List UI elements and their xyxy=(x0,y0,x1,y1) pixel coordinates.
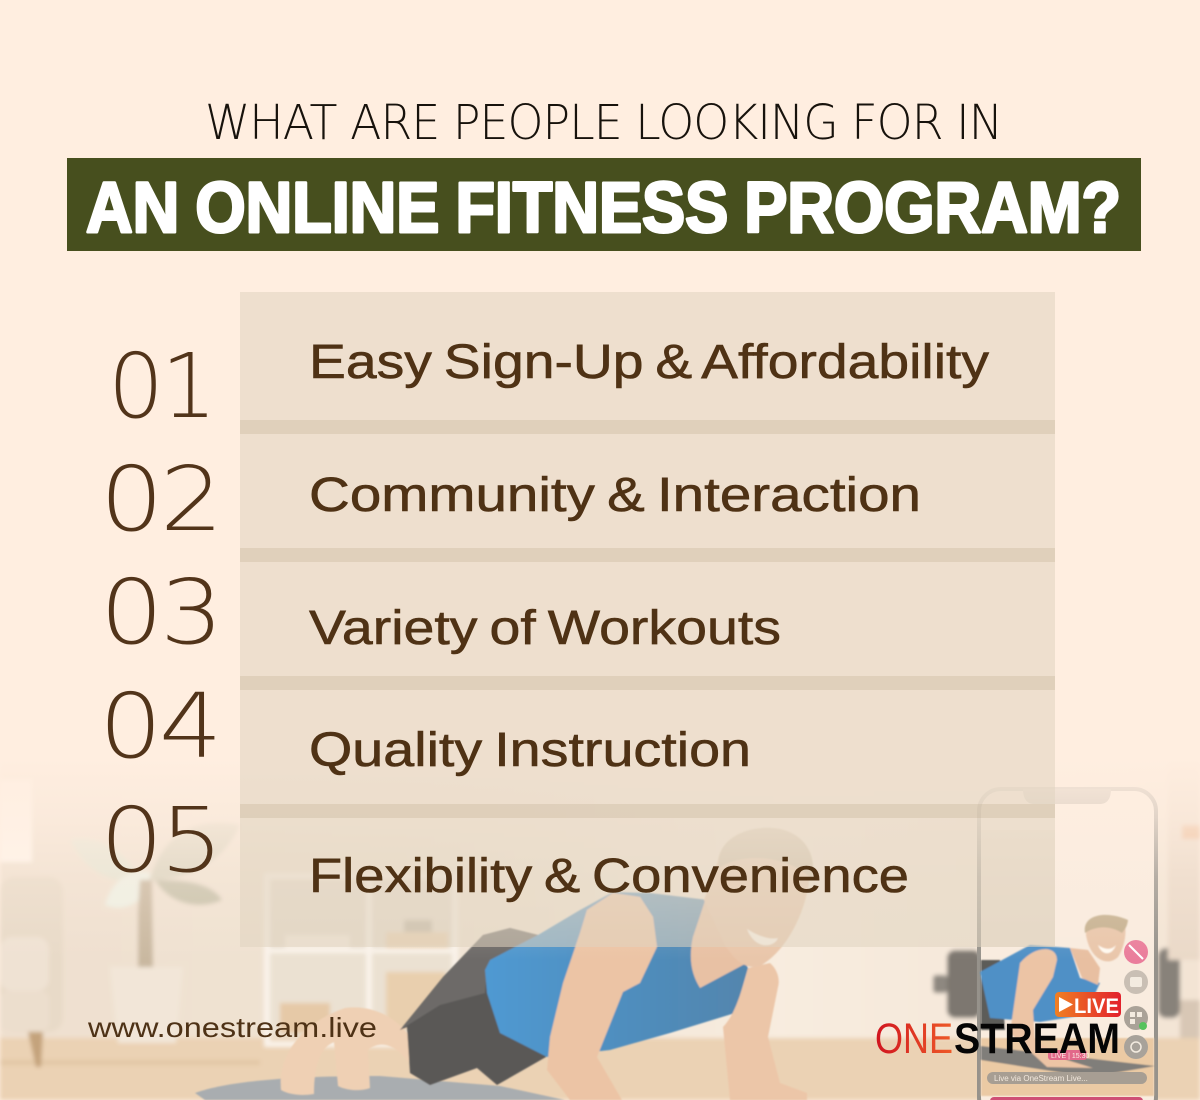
photo: exercise mat xyxy=(195,1076,565,1100)
number 04: 04 xyxy=(99,674,219,778)
number 03: 03 xyxy=(100,560,220,664)
phone: control buttons xyxy=(1124,940,1148,1059)
man: head xyxy=(704,828,813,967)
man: left arm xyxy=(547,893,657,1100)
phone: comment bar xyxy=(987,1072,1147,1084)
title line: WHAT ARE PEOPLE LOOKING FOR IN xyxy=(205,95,1002,151)
man: legs and feet xyxy=(281,1007,412,1095)
panel: item 2: Community & Interaction xyxy=(309,469,921,522)
photo fade into page colour xyxy=(0,755,1200,960)
phone: comment bar: Live via OneStream Live... xyxy=(994,1074,1088,1083)
number 01: 01 xyxy=(108,334,214,438)
panel: item 3: Variety of Workouts xyxy=(309,602,781,655)
phone: live timer pill xyxy=(1048,1050,1090,1060)
phone: live timer pill: LIVE | 15:30 xyxy=(1051,1053,1090,1060)
man: right arm xyxy=(723,963,807,1100)
logo: wordmark xyxy=(875,1015,1120,1063)
photo: room with sofa, plant and shelf xyxy=(0,760,1200,1100)
list panels xyxy=(240,292,1055,947)
logo: live badge xyxy=(1055,992,1121,1018)
divider strip 4 xyxy=(240,804,1055,818)
background photo: living room and man doing plank xyxy=(0,755,1200,1100)
number 05: 05 xyxy=(100,788,220,892)
phone: pink action bar xyxy=(990,1097,1143,1100)
divider strip 3 xyxy=(240,676,1055,690)
number 02: 02 xyxy=(100,447,220,551)
divider strip 1 xyxy=(240,420,1055,434)
logo: wordmark: STREAM xyxy=(954,1015,1120,1063)
panel: item 5 xyxy=(240,818,1055,947)
divider strip 2 xyxy=(240,548,1055,562)
panel: item 1 xyxy=(240,292,1055,420)
logo: wordmark: ONE xyxy=(875,1015,953,1063)
panel: item 4: Quality Instruction xyxy=(309,724,751,777)
logo: OneStream Live xyxy=(875,992,1121,1063)
panel: item 1: Easy Sign-Up & Affordability xyxy=(309,336,989,389)
title banner: AN ONLINE FITNESS PROGRAM? xyxy=(86,169,1121,248)
photo: phone mockup xyxy=(979,789,1156,1100)
logo: live badge: LIVE xyxy=(1074,995,1119,1018)
photo: man in plank xyxy=(281,828,813,1100)
panel: item 2 xyxy=(240,434,1055,548)
panel: item 4 xyxy=(240,690,1055,804)
phone: mini man xyxy=(980,915,1155,1096)
website url: www.onestream.live xyxy=(87,1012,377,1043)
man: vest xyxy=(485,892,748,1057)
panel: item 3 xyxy=(240,562,1055,676)
man: neck and chest xyxy=(691,880,770,988)
panel: item 5: Flexibility & Convenience xyxy=(309,850,909,903)
man: shorts xyxy=(400,928,560,1085)
